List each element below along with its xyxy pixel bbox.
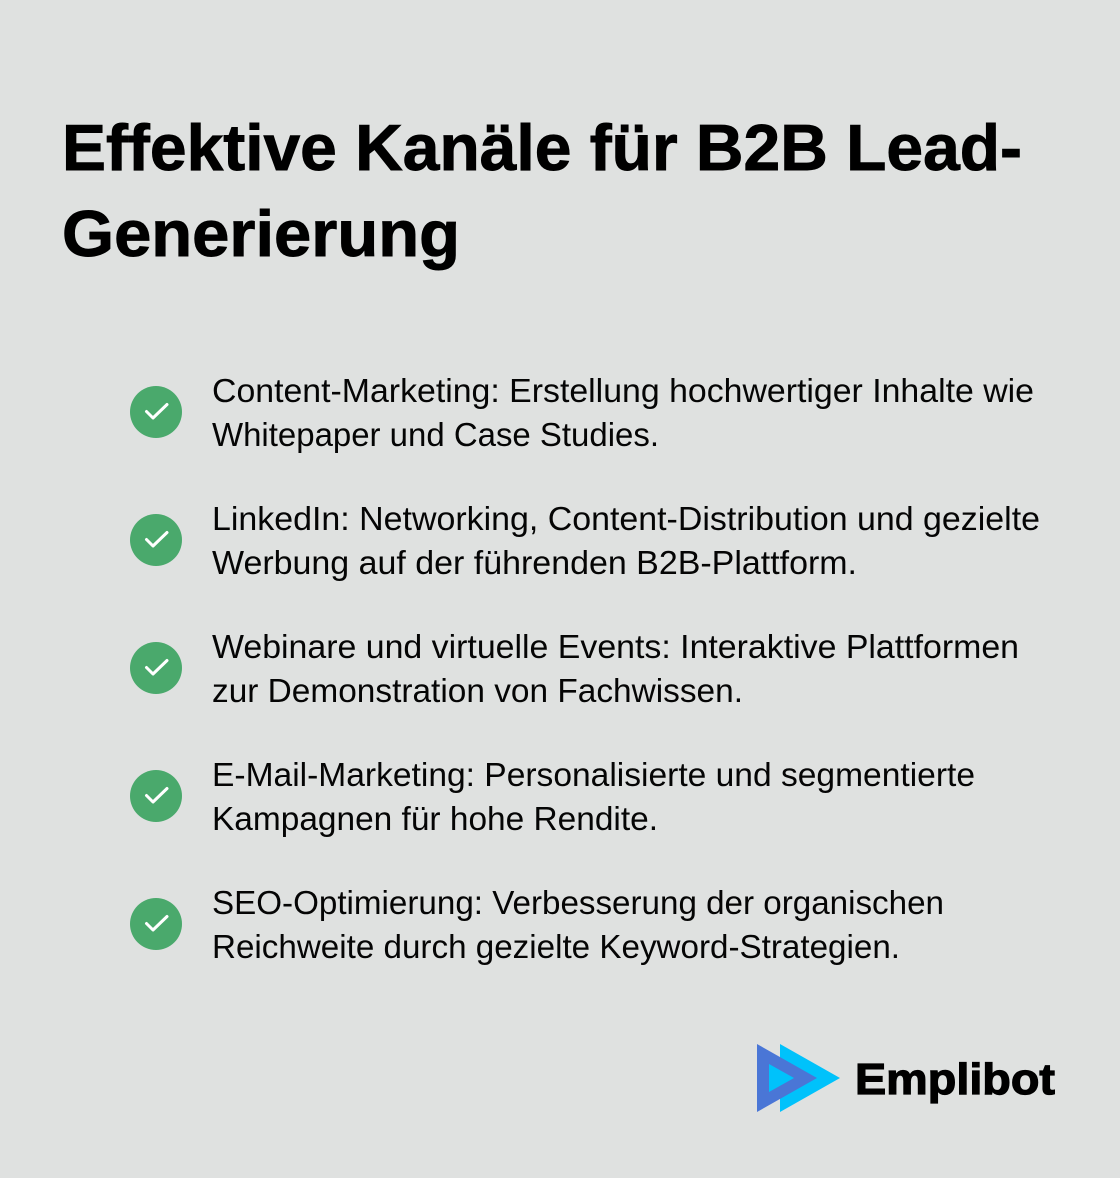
logo: Emplibot xyxy=(757,1044,1055,1112)
text: E-Mail-Marketing: Kampagnen für hohe Rendite. xyxy=(212,800,658,837)
list item: SEO-Optimierung xyxy=(130,884,944,965)
text: SEO-Optimierung: Reichweite durch gezielte Keyword-Strategien. xyxy=(212,928,900,965)
text: Webinare: Webinare und virtuelle Events: Interaktive Plattformen xyxy=(212,628,1019,665)
text: Content-Marketing: Whitepaper und Case Studies. xyxy=(212,416,659,453)
text: Webinare xyxy=(212,628,1019,709)
text: E-Mail-Marketing: E-Mail-Marketing: Personalisierte und segmentierte xyxy=(212,756,975,793)
icon: play triangles xyxy=(757,1044,840,1112)
list item: LinkedIn xyxy=(130,500,1040,581)
list item: Content-Marketing xyxy=(130,372,1034,453)
icon: green check xyxy=(130,770,182,822)
list item: Webinare xyxy=(130,628,1019,709)
text: Content-Marketing: Content-Marketing: Erstellung hochwertiger Inhalte wie xyxy=(212,372,1034,409)
text: Content-Marketing xyxy=(212,372,1034,453)
wordmark: Emplibot xyxy=(855,1055,1055,1104)
icon: green check xyxy=(130,514,182,566)
text: Webinare: zur Demonstration von Fachwissen. xyxy=(212,672,743,709)
text: E-Mail-Marketing xyxy=(212,756,975,837)
title: Effektive Kanäle für B2B Lead- xyxy=(62,111,1022,184)
text: SEO-Optimierung: SEO-Optimierung: Verbesserung der organischen xyxy=(212,884,944,921)
title: Generierung xyxy=(62,197,460,270)
checklist of channels xyxy=(130,372,1040,965)
text: SEO-Optimierung xyxy=(212,884,944,965)
icon: green check xyxy=(130,642,182,694)
title xyxy=(62,111,1022,270)
icon: green check xyxy=(130,386,182,438)
text: LinkedIn: LinkedIn: Networking, Content-Distribution und gezielte xyxy=(212,500,1040,537)
text: LinkedIn xyxy=(212,500,1040,581)
icon: green check xyxy=(130,898,182,950)
text: LinkedIn: Werbung auf der führenden B2B-Plattform. xyxy=(212,544,857,581)
list item: E-Mail-Marketing xyxy=(130,756,975,837)
